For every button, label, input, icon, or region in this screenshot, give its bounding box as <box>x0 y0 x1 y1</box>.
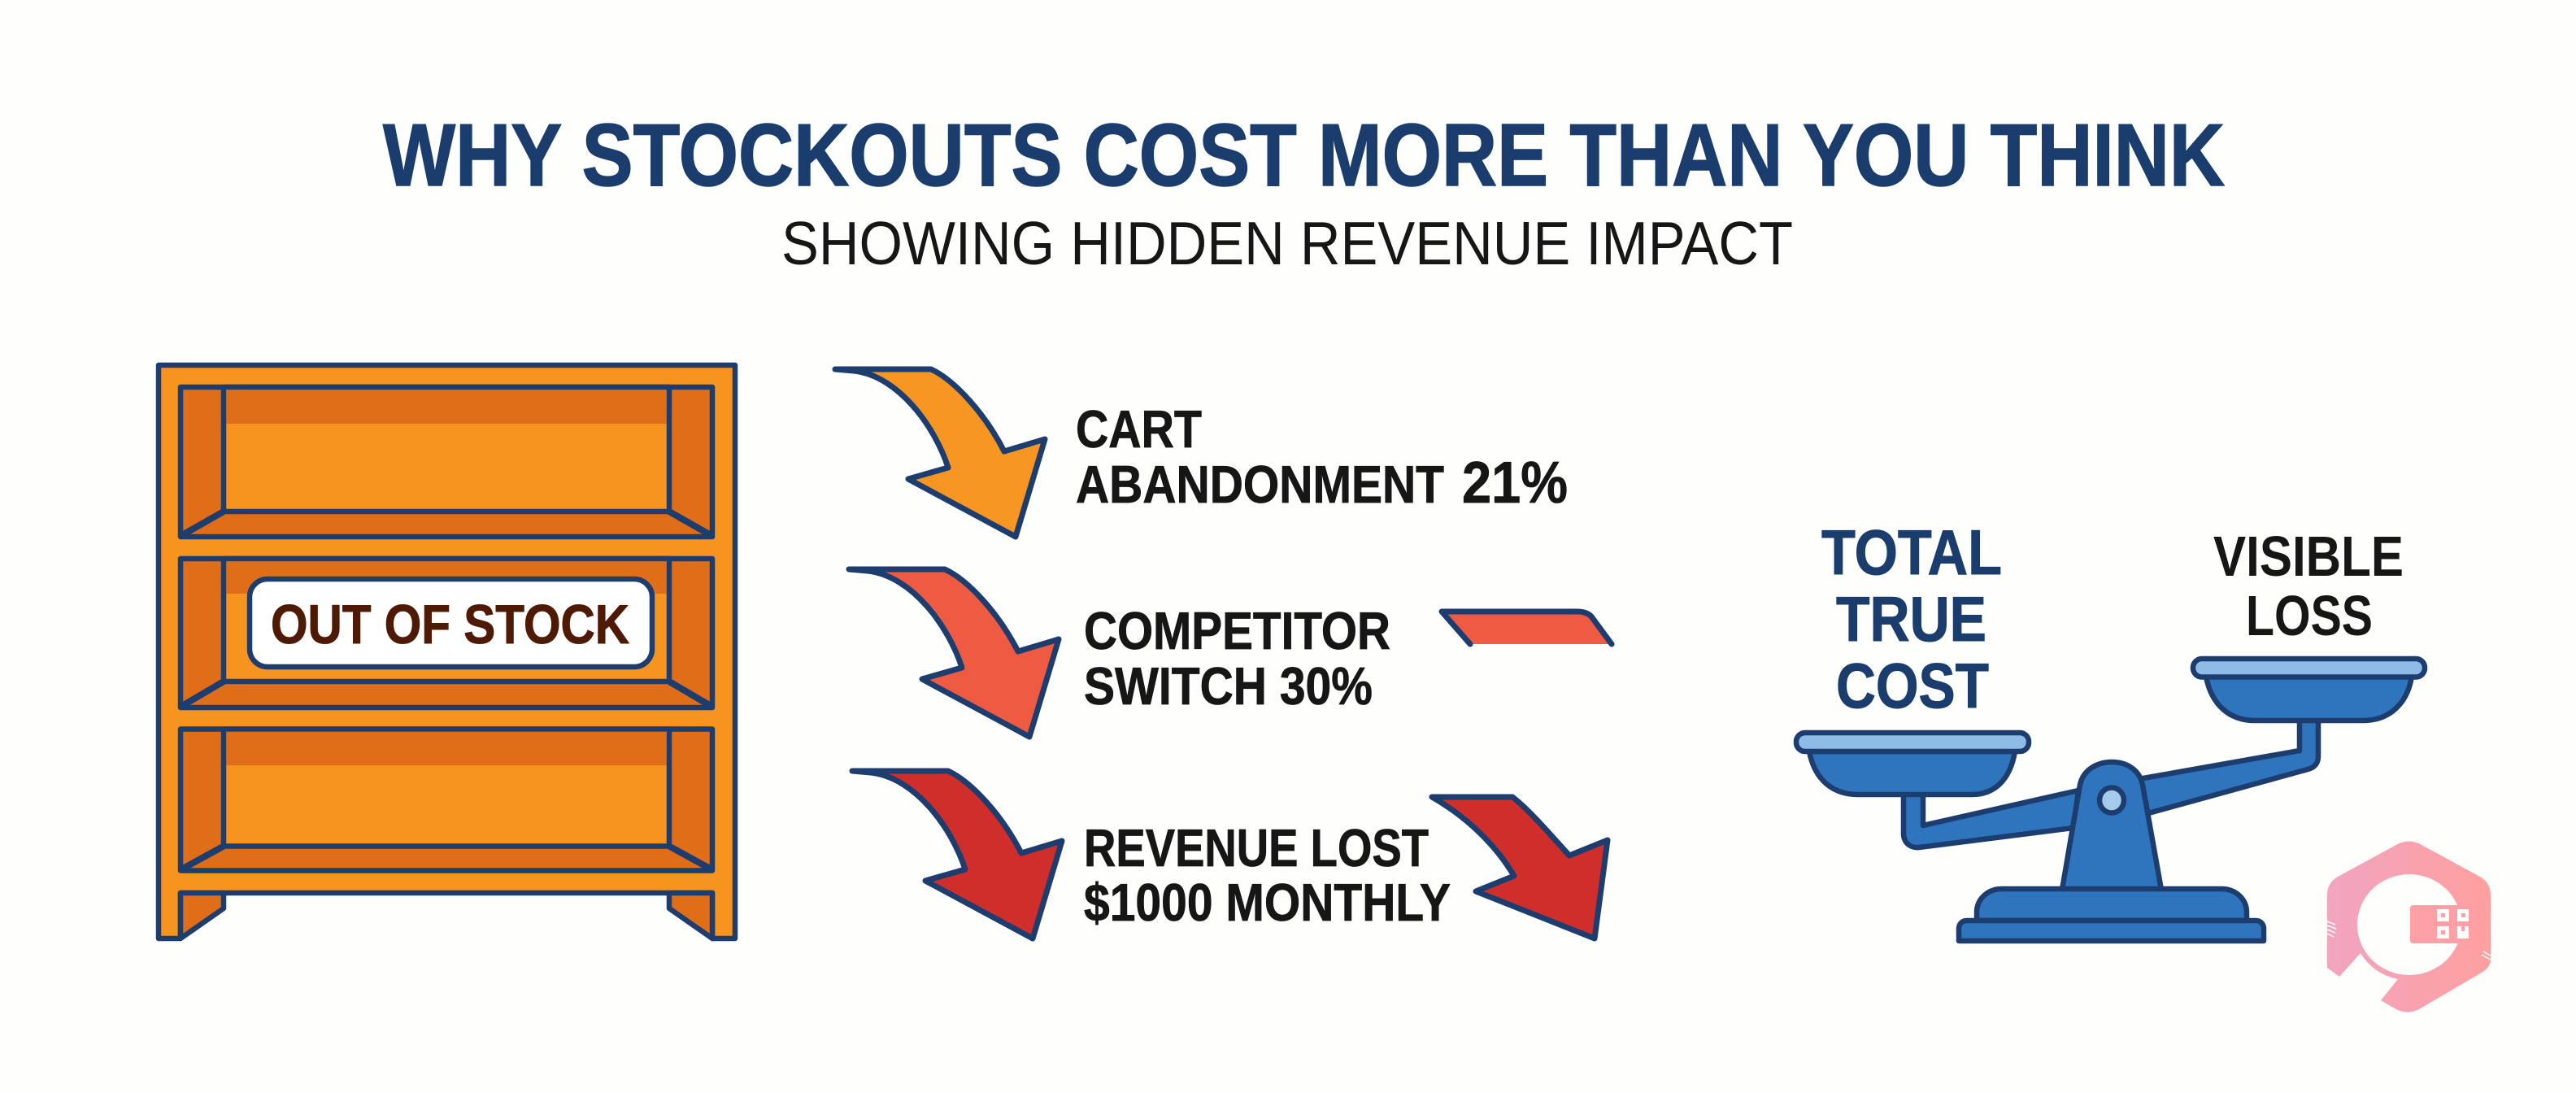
label: cart abandonment 21%: 21% <box>1462 451 1568 516</box>
label: competitor switch 30% <box>1084 601 1390 716</box>
arrow: revenue lost <box>852 771 1062 938</box>
right arm <box>2139 719 2318 813</box>
out of stock sign: OUT OF STOCK <box>271 594 629 655</box>
left shelf leg <box>181 893 224 938</box>
label: revenue lost $1000 monthly <box>1084 818 1451 932</box>
label: competitor switch 30%: COMPETITOR <box>1084 601 1390 660</box>
icon: empty store shelf <box>159 365 735 938</box>
watermark logo <box>2327 841 2491 1012</box>
base dome <box>1977 889 2247 921</box>
label: total true cost <box>1821 516 2002 721</box>
label: total true cost: COST <box>1836 650 1989 721</box>
label: cart abandonment 21%: ABANDONMENT <box>1076 455 1444 514</box>
shelf bay: bottom <box>181 729 712 870</box>
shelf bay: top <box>181 387 712 537</box>
title: WHY STOCKOUTS COST MORE THAN YOU THINK <box>383 106 2225 205</box>
label: cart abandonment 21%: CART <box>1076 399 1202 459</box>
arrow: cart abandonment <box>835 369 1045 537</box>
arrow: competitor switch <box>849 569 1059 737</box>
base plate <box>1959 921 2264 941</box>
right pan <box>2193 659 2425 721</box>
label: visible loss: LOSS <box>2246 584 2373 647</box>
shelf frame <box>159 365 735 938</box>
left pan <box>1796 733 2029 795</box>
label: visible loss <box>2213 525 2404 647</box>
label: revenue lost $1000 monthly: $1000 MONTHLY <box>1084 873 1451 932</box>
pivot <box>2100 787 2124 813</box>
label: cart abandonment 21% <box>1076 399 1568 516</box>
shelf bay: middle <box>181 559 712 708</box>
label: revenue lost $1000 monthly: REVENUE LOST <box>1084 818 1429 877</box>
left arm <box>1904 790 2078 847</box>
icon: balance scale <box>1796 659 2425 941</box>
right shelf leg <box>669 893 712 938</box>
arrow: right red <box>1432 797 1608 938</box>
subtitle: SHOWING HIDDEN REVENUE IMPACT <box>781 209 1793 277</box>
pillar <box>2062 762 2161 890</box>
label: competitor switch 30%: SWITCH 30% <box>1084 656 1373 716</box>
label: total true cost: TOTAL <box>1821 516 2002 588</box>
label: visible loss: VISIBLE <box>2213 525 2404 588</box>
arrow fragment <box>1442 612 1612 644</box>
label: total true cost: TRUE <box>1836 583 1986 655</box>
out of stock sign <box>250 579 652 667</box>
